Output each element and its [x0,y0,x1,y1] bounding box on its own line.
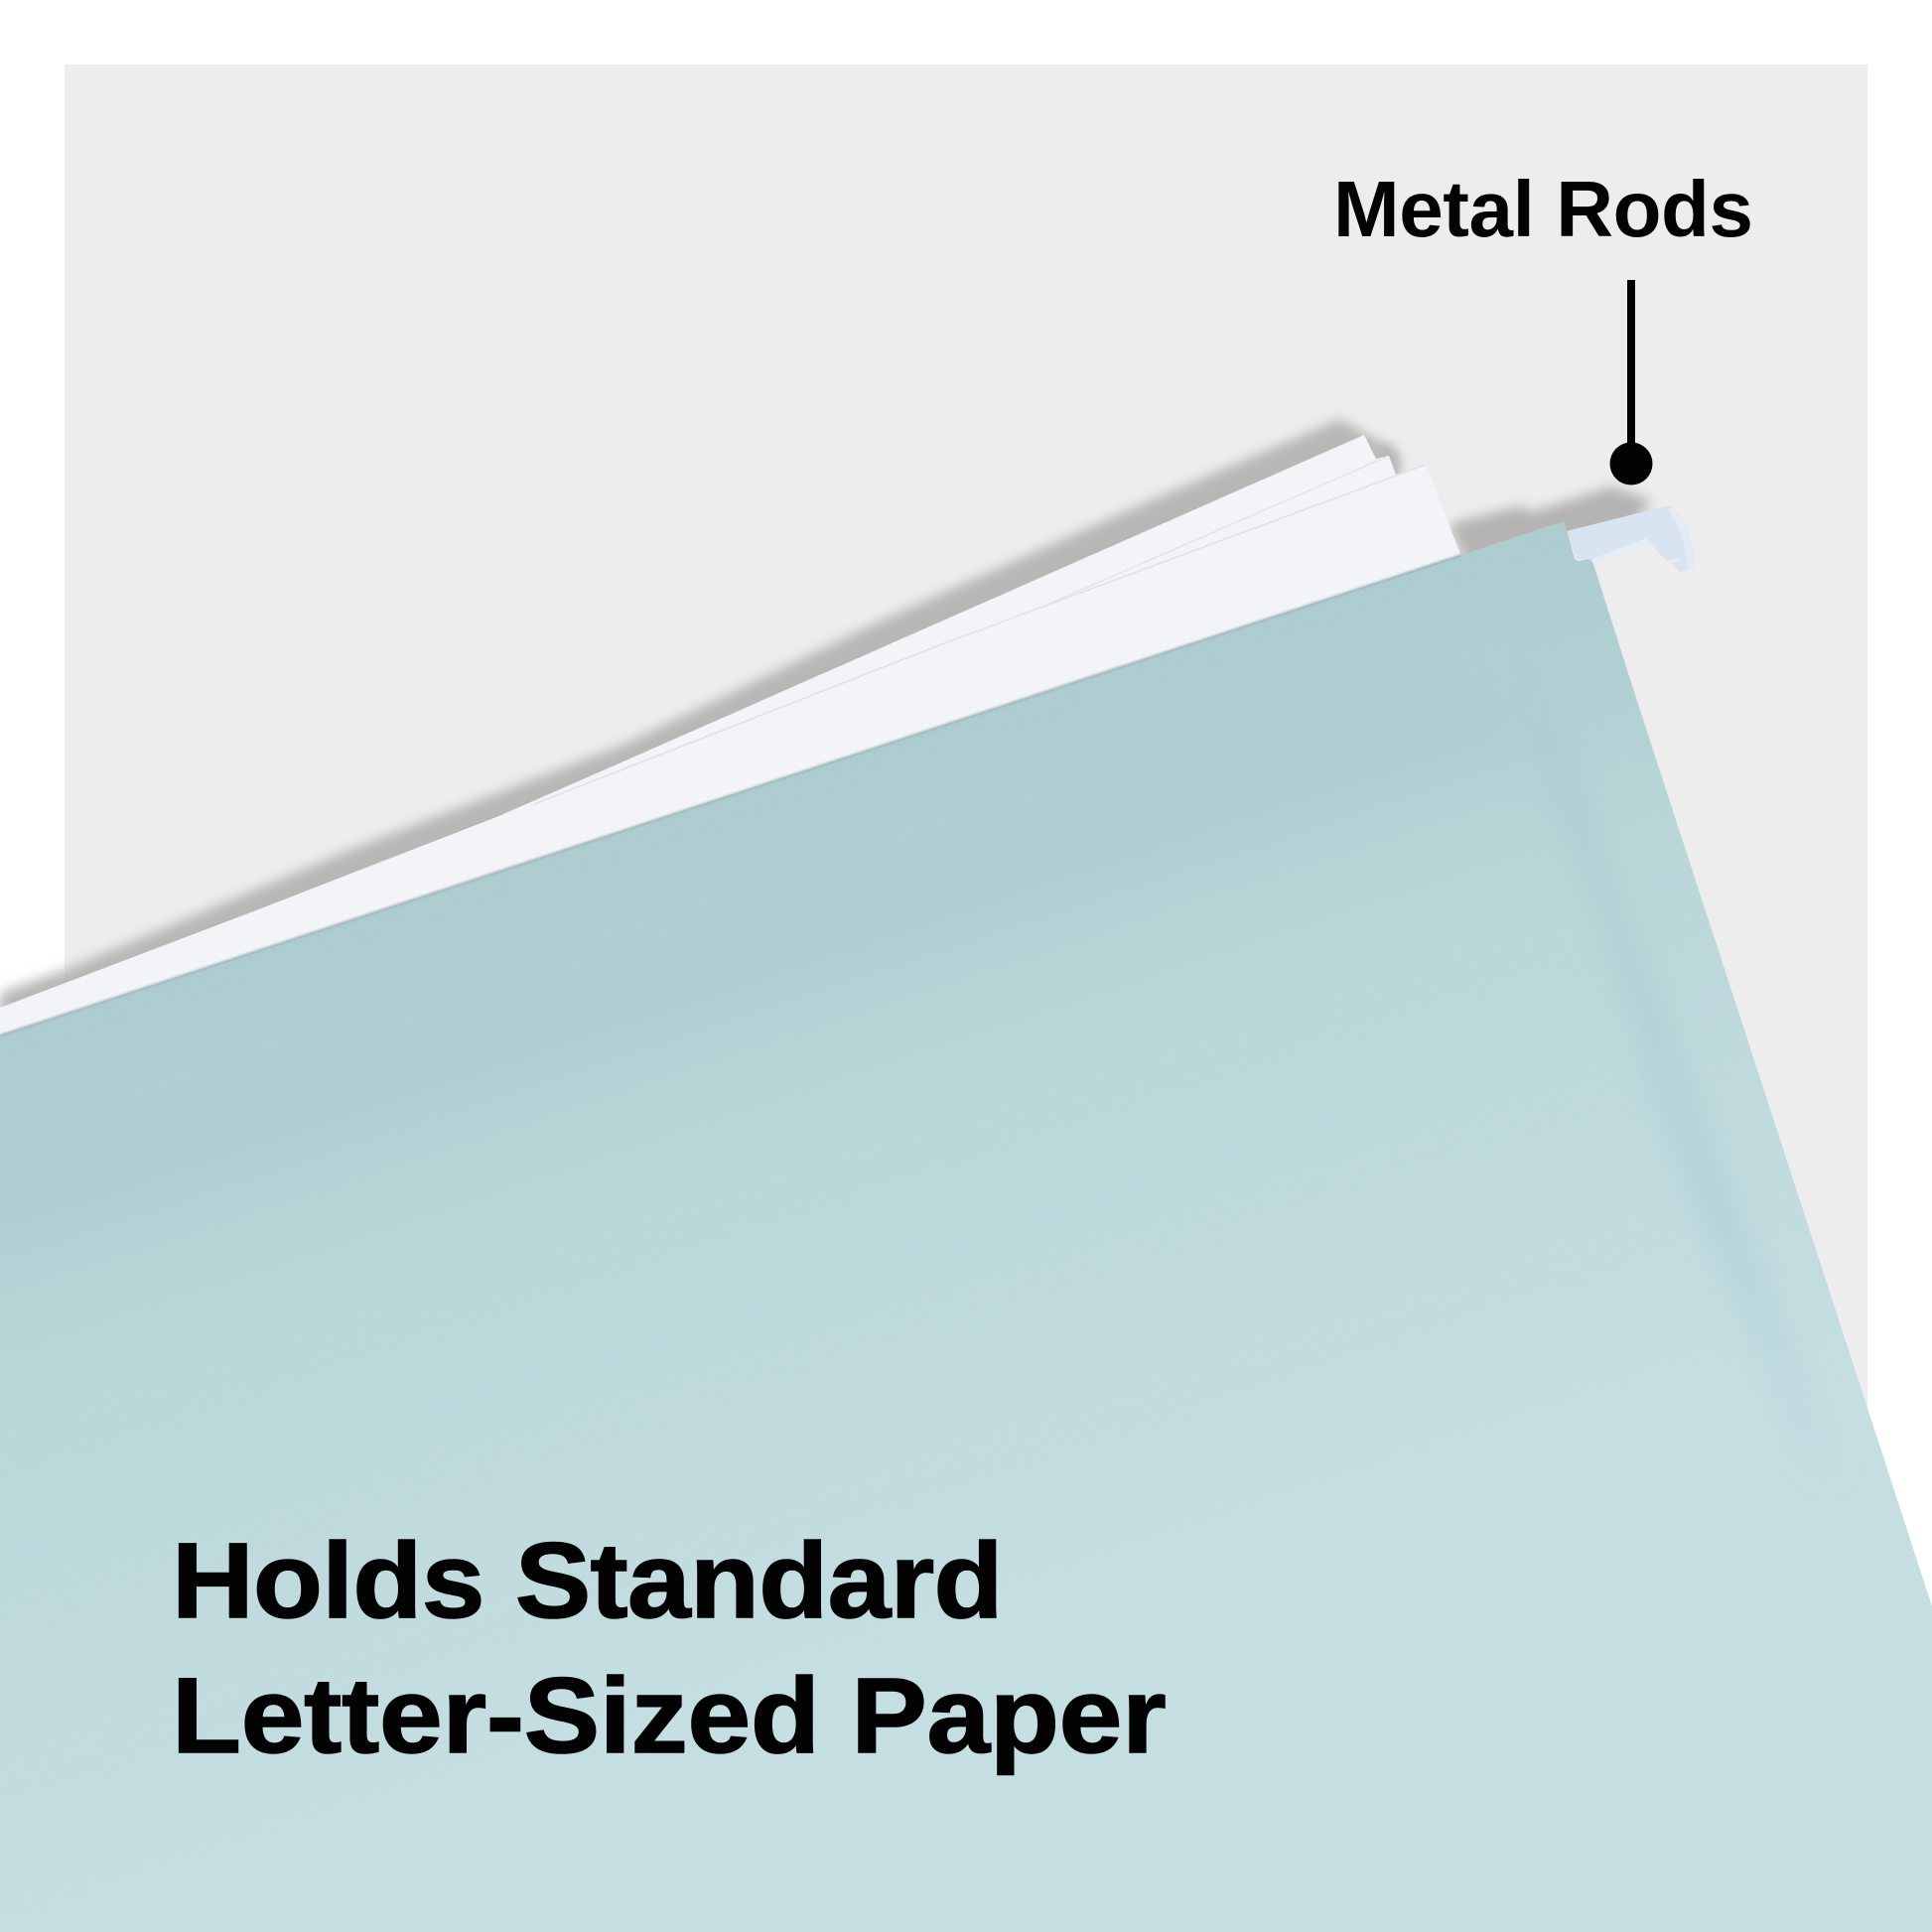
paper shadow [0,419,1401,1033]
heading: Holds Standard Letter-Sized Paper: Letter-Sized Paper [172,1655,1167,1775]
label: Metal Rods: Metal Rods [1333,165,1753,253]
leader line [1627,280,1635,449]
heading: Holds Standard Letter-Sized Paper [172,1520,1167,1775]
metal rod hook [1567,506,1695,572]
heading: Holds Standard Letter-Sized Paper: Holds Standard [172,1520,1003,1640]
callout: Metal Rods [1333,165,1753,484]
leader dot [1610,443,1652,484]
paper sheets [0,435,1464,1044]
hanging folder [0,496,1932,1932]
rod shadow [1449,486,1652,571]
